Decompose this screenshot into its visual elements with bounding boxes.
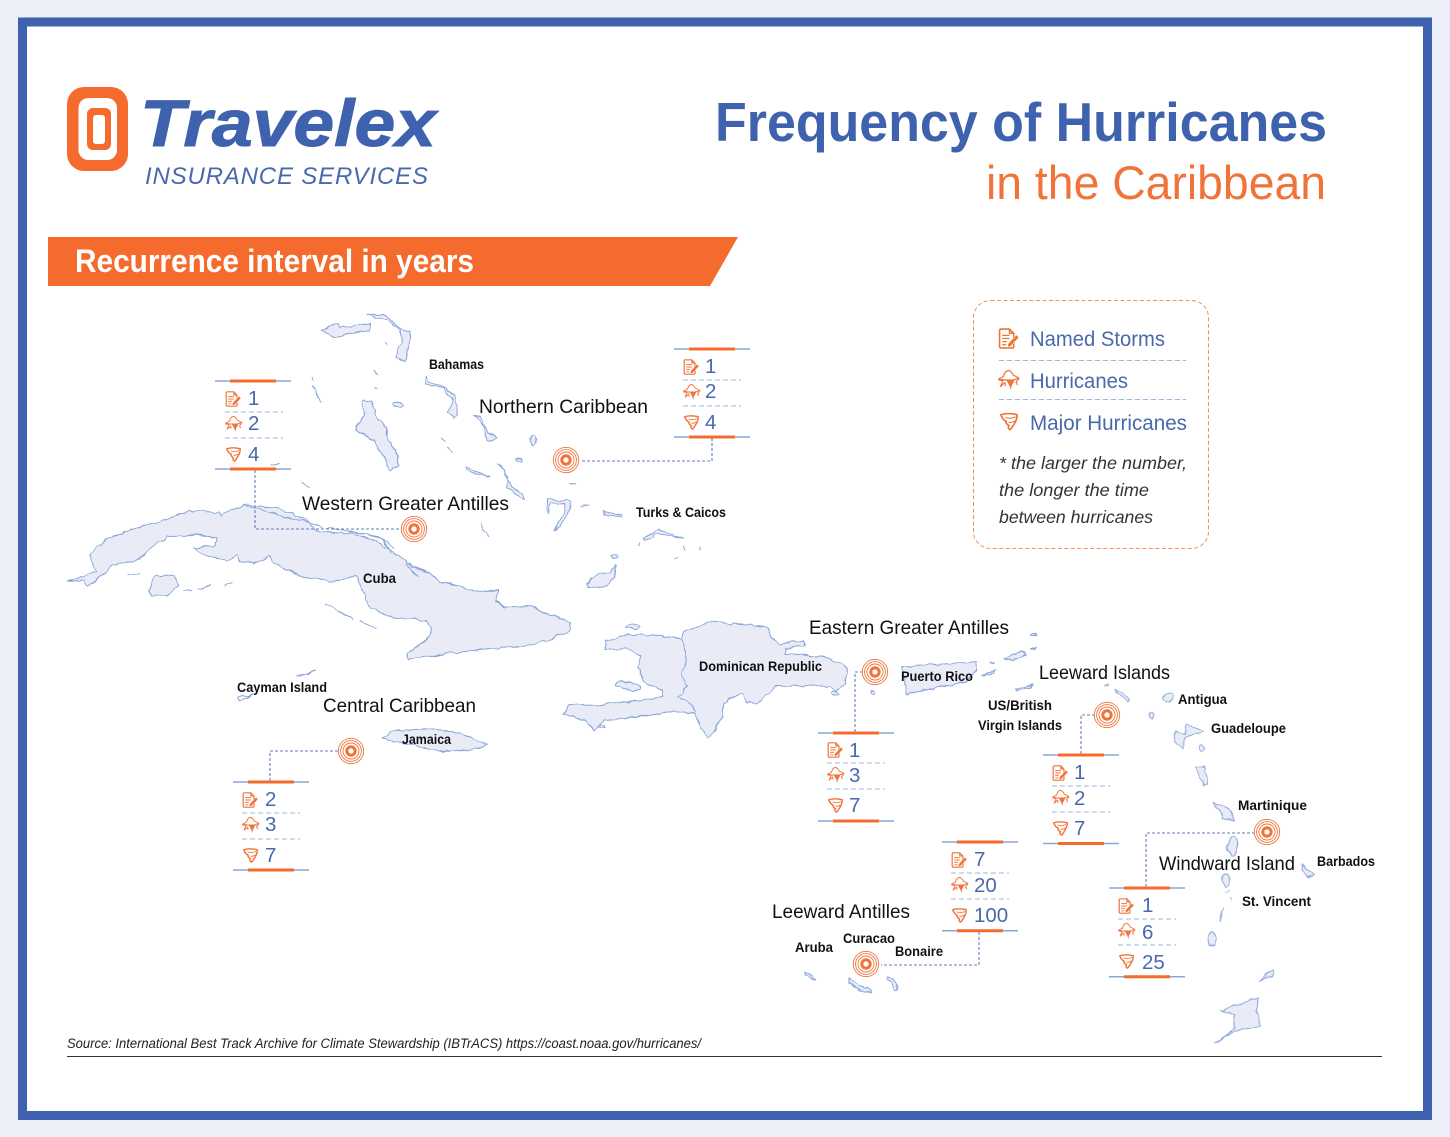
data box: Northern Caribbean: 4 (705, 411, 716, 434)
region label: Leeward Antilles: Leeward Antilles (772, 901, 910, 923)
place names: Curacao (843, 931, 895, 946)
data box: Leeward Antilles: 7 (974, 848, 985, 871)
target marker: Windward Island (1254, 819, 1280, 845)
region label: Windward Island: Windward Island (1159, 853, 1295, 875)
map of Caribbean islands (67, 314, 1313, 1043)
Hispaniola, Puerto Rico, Virgin Islands (563, 622, 1037, 738)
target marker: Western Greater Antilles (401, 516, 427, 542)
data box: Western Greater Antilles: 1 (248, 387, 259, 410)
region label: Eastern Greater Antilles: Eastern Greater Antilles (809, 617, 1009, 639)
source note: Source: International Best Track Archive for Climate Stewardship (IBTrACS) https://coast.noaa.gov/hurricanes/ (67, 1036, 702, 1051)
data box: Leeward Antilles: 20 (974, 874, 997, 897)
connector lines (255, 438, 1254, 965)
place names: Antigua (1178, 692, 1227, 707)
legend icon: major hurricanes (1001, 414, 1017, 430)
place names: Dominican Republic (699, 659, 822, 674)
data box: Windward Island: 25 (1142, 951, 1165, 974)
data box: Central Caribbean (233, 780, 309, 872)
place names: Bahamas (429, 357, 484, 372)
legend label: named storms: Named Storms (1030, 327, 1165, 351)
Cuba and Isle of Youth (67, 463, 571, 676)
place names: US/British (988, 698, 1052, 713)
logo tagline: INSURANCE SERVICES (145, 163, 428, 190)
region label: Western Greater Antilles: Western Greater Antilles (302, 493, 509, 515)
place names: Turks & Caicos (636, 505, 726, 520)
data box: Northern Caribbean: 1 (705, 355, 716, 378)
place names: Jamaica (402, 732, 451, 747)
data box: Northern Caribbean (674, 348, 750, 438)
target marker: Leeward Antilles (853, 951, 879, 977)
legend panel (974, 300, 1208, 548)
target marker: Leeward Islands (1094, 702, 1120, 728)
data box: Eastern Greater Antilles (818, 732, 894, 822)
data box: Eastern Greater Antilles: 1 (849, 739, 860, 762)
data box: Central Caribbean: 7 (265, 844, 276, 867)
logo mark (67, 87, 128, 171)
data box: Eastern Greater Antilles: 7 (849, 794, 860, 817)
title (715, 91, 1327, 209)
legend note: the longer the time (999, 480, 1149, 500)
place names: St. Vincent (1242, 894, 1311, 909)
legend note: * the larger the number, (999, 453, 1187, 473)
banner heading: Recurrence interval in years (75, 243, 474, 279)
target marker: Central Caribbean (338, 738, 364, 764)
data box: Western Greater Antilles (215, 380, 291, 470)
data box: Leeward Islands: 2 (1074, 787, 1085, 810)
data box: Western Greater Antilles: 2 (248, 412, 259, 435)
place names: Cuba (363, 571, 396, 586)
data box: Leeward Antilles: 100 (974, 904, 1008, 927)
data box: Leeward Islands: 1 (1074, 761, 1085, 784)
legend note (999, 453, 1187, 527)
data box: Central Caribbean: 2 (265, 788, 276, 811)
logo: Travelex Insurance Services (67, 86, 439, 190)
data box: Windward Island (1109, 886, 1185, 978)
data box: Leeward Islands: 7 (1074, 817, 1085, 840)
region label: Northern Caribbean: Northern Caribbean (479, 396, 648, 418)
target marker: Eastern Greater Antilles (862, 659, 888, 685)
data box: Windward Island: 1 (1142, 894, 1153, 917)
place names: Barbados (1317, 854, 1375, 869)
region label: Central Caribbean: Central Caribbean (323, 695, 476, 717)
legend icon: hurricanes (998, 370, 1019, 390)
place names: Puerto Rico (901, 669, 973, 684)
data box: Windward Island: 6 (1142, 921, 1153, 944)
legend note: between hurricanes (999, 507, 1153, 527)
data box: Leeward Islands (1043, 754, 1119, 845)
title line 2: in the Caribbean (986, 156, 1326, 209)
data box: Western Greater Antilles: 4 (248, 443, 259, 466)
section banner (48, 237, 738, 286)
data box: Central Caribbean: 3 (265, 813, 276, 836)
place names: Bonaire (895, 944, 943, 959)
data box: Northern Caribbean: 2 (705, 380, 716, 403)
legend icon: named storms (1000, 329, 1019, 348)
target marker: Northern Caribbean (553, 447, 579, 473)
Jamaica and Cayman (383, 729, 487, 752)
region label: Leeward Islands: Leeward Islands (1039, 662, 1170, 684)
logo wordmark: Travelex (140, 86, 439, 160)
Aruba, Curacao, Bonaire (806, 972, 898, 993)
legend label: hurricanes: Hurricanes (1030, 369, 1128, 393)
place names (237, 357, 1375, 959)
Bahamas and Turks & Caicos (313, 314, 700, 587)
place names: Cayman Island (237, 680, 327, 695)
title line 1: Frequency of Hurricanes (715, 91, 1327, 153)
place names: Virgin Islands (978, 718, 1062, 733)
Lesser Antilles, Trinidad and Tobago (1106, 684, 1313, 1043)
legend label: major hurricanes: Major Hurricanes (1030, 411, 1187, 435)
place names: Guadeloupe (1211, 721, 1286, 736)
place names: Martinique (1238, 798, 1307, 813)
data box: Eastern Greater Antilles: 3 (849, 764, 860, 787)
data box: Leeward Antilles (942, 840, 1018, 932)
place names: Aruba (795, 940, 833, 955)
